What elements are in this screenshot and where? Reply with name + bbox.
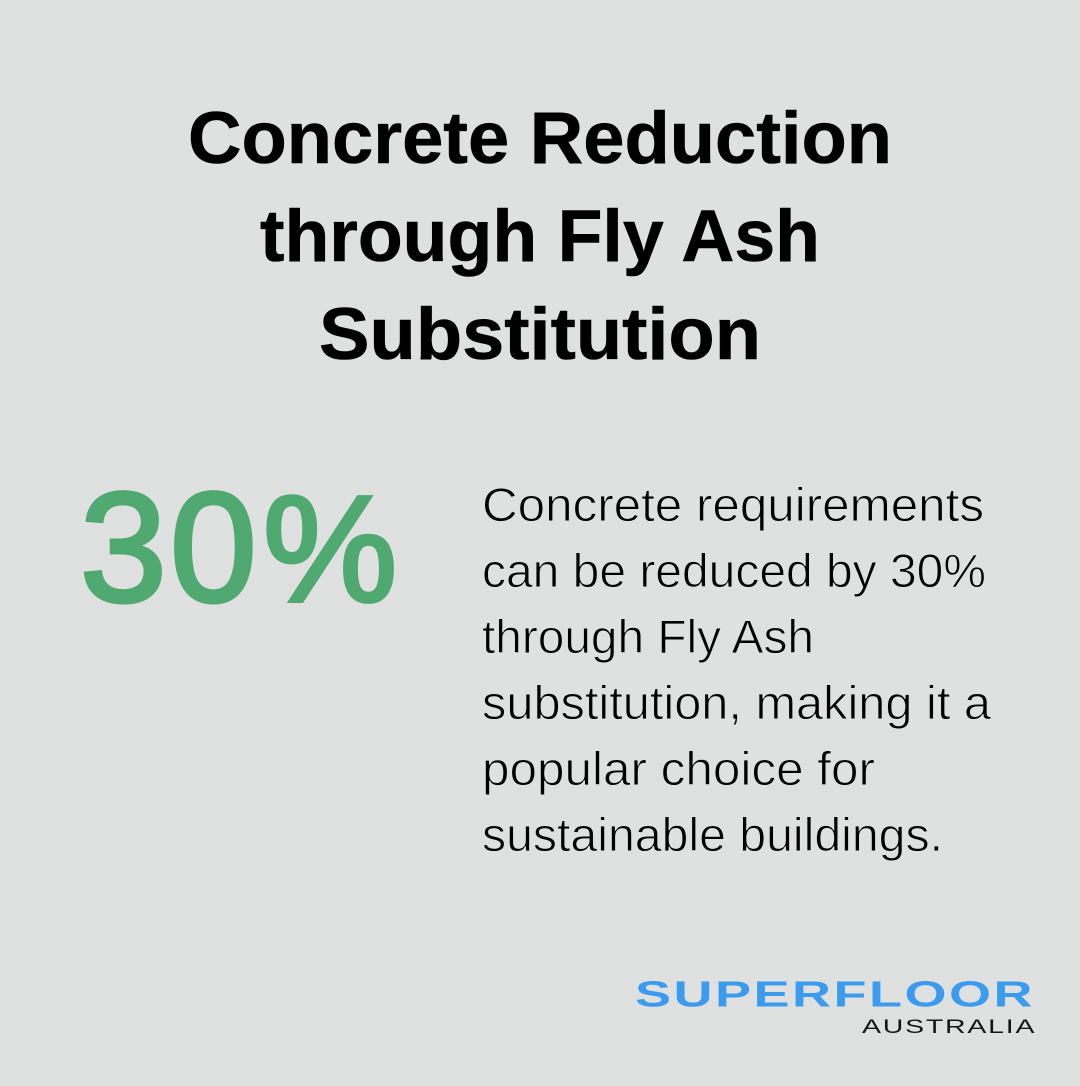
title: through Fly Ash bbox=[260, 196, 820, 277]
description text: Concrete requirements bbox=[482, 478, 984, 531]
description text: popular choice for bbox=[482, 742, 875, 795]
description text: can be reduced by 30% bbox=[482, 544, 986, 597]
big statistic: 30%: % bbox=[263, 464, 397, 633]
big statistic: 30%: 3 bbox=[80, 461, 167, 635]
description text: sustainable buildings. bbox=[482, 808, 943, 861]
title: Substitution bbox=[319, 294, 761, 375]
logo wordmark: SUPERFLOOR bbox=[635, 974, 1032, 1014]
title bbox=[188, 98, 892, 375]
description text bbox=[482, 478, 992, 861]
description text: through Fly Ash bbox=[482, 610, 814, 663]
big statistic: 30%: 0 bbox=[170, 461, 257, 635]
title: Concrete Reduction bbox=[188, 98, 892, 179]
logo: Superfloor Australia bbox=[635, 974, 1035, 1038]
description text: substitution, making it a bbox=[482, 676, 992, 729]
logo subtitle: AUSTRALIA bbox=[862, 1017, 1035, 1038]
